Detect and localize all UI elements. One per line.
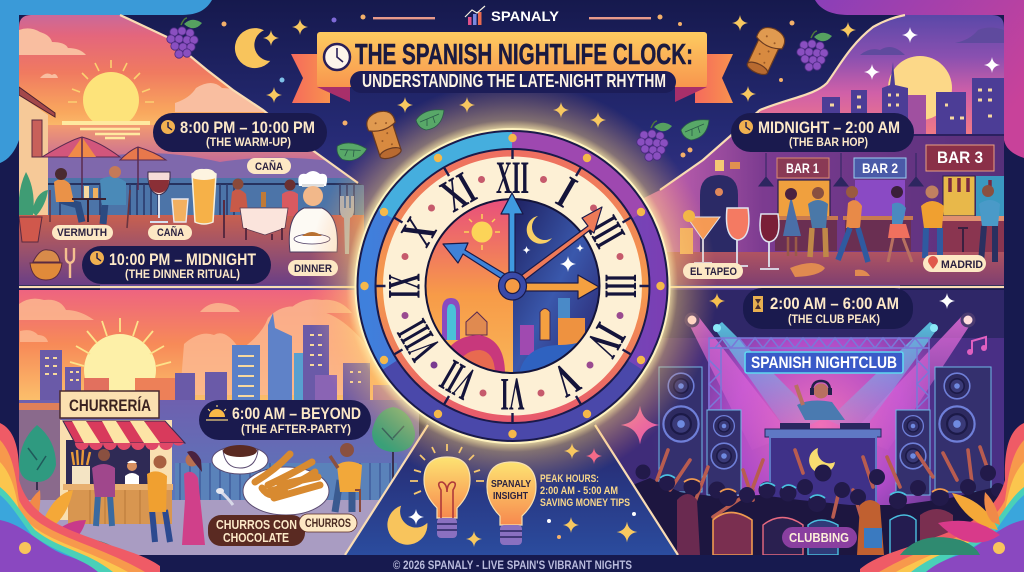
- sign: bar 2: BAR 2: [862, 161, 898, 176]
- peak hours tips: SAVING MONEY TIPS: [540, 497, 630, 509]
- label: dinner: DINNER: [294, 263, 332, 275]
- icon: leaf top: [416, 110, 444, 130]
- fence: [175, 463, 397, 503]
- band outline: [376, 149, 650, 423]
- face dots: [402, 176, 624, 396]
- roman numerals: XI: [433, 162, 484, 222]
- windows: [45, 335, 361, 396]
- title: THE SPANISH NIGHTLIFE CLOCK:: [355, 39, 693, 71]
- icon: leaf left: [333, 137, 367, 167]
- icon: grapes left: [167, 18, 202, 58]
- seated man: [330, 443, 362, 512]
- ribbon folds: [317, 87, 707, 102]
- dial scene outline: [426, 199, 600, 373]
- interior wall: [620, 134, 1010, 259]
- bezel top-left: [385, 140, 512, 214]
- banner plate: [317, 32, 707, 87]
- bar counters: [770, 216, 1006, 255]
- sign: churrería: [60, 391, 159, 418]
- label: churros: [299, 514, 357, 532]
- arch and domes: [442, 298, 585, 355]
- floor puddles: [790, 263, 870, 277]
- trees: [19, 407, 415, 490]
- sign: bar 1: [777, 158, 829, 178]
- hills: [48, 153, 359, 184]
- roman numerals: XII: [496, 152, 529, 204]
- speaker: right large: [935, 367, 991, 492]
- speakers: [659, 367, 991, 495]
- drinks: vermouth and caña: [148, 169, 216, 224]
- coloured inner band: [380, 153, 646, 419]
- churro stall: [60, 420, 173, 524]
- footer credit: © 2026 SPANALY - LIVE SPAIN'S VIBRANT NIGHTS: [393, 558, 632, 572]
- time pill: bar hop: (THE BAR HOP): [789, 135, 868, 149]
- label: churros con chocolate: [208, 515, 305, 546]
- clock outer edge: [354, 128, 670, 444]
- couple at table: [50, 166, 130, 228]
- logo icon: [465, 6, 485, 25]
- hub centre: [505, 278, 520, 294]
- bulb rays: [410, 444, 484, 494]
- bulb caption: [491, 478, 531, 502]
- lamps: [759, 153, 923, 186]
- bulb caption: INSIGHT: [493, 490, 528, 502]
- diagonal sky wedge: [660, 112, 760, 192]
- skyline: [40, 313, 403, 400]
- roman numerals: IV: [576, 315, 636, 365]
- ribbon right tail: [695, 54, 733, 103]
- hand: upward minute: [501, 193, 523, 280]
- night moon: [527, 216, 552, 244]
- sign: bar 3: BAR 3: [937, 148, 983, 167]
- stage backdrop: [590, 290, 1010, 560]
- label: churros con chocolate: CHOCOLATE: [223, 531, 289, 545]
- icon: clock: [161, 120, 175, 134]
- icon: grapes right: [797, 31, 832, 71]
- roman numerals: X: [391, 209, 447, 255]
- hour ticks and gold studs: [360, 134, 665, 438]
- tapas door: [680, 160, 740, 254]
- label: dinner: [288, 260, 338, 276]
- pavement: [28, 500, 379, 555]
- clouds: [860, 28, 1004, 55]
- brand rules: [373, 17, 651, 19]
- time pill: warm-up: [153, 113, 327, 152]
- coloured bezel: [366, 140, 658, 432]
- spot lamps: [686, 314, 974, 332]
- hand: upper right: [518, 207, 602, 283]
- icon: grapes centre: [637, 121, 672, 161]
- roman numerals: I: [548, 167, 585, 218]
- crowd: [620, 447, 1005, 555]
- roman numerals: III: [594, 274, 646, 298]
- clouds: [19, 299, 370, 395]
- bezel bottom: [390, 365, 635, 432]
- label: caña lower: [148, 225, 192, 240]
- label: caña upper: [247, 158, 291, 174]
- time pill: warm-up: 8:00 PM – 10:00 PM: [180, 118, 315, 137]
- speaker: left large: [659, 367, 702, 492]
- chef: [289, 171, 337, 252]
- moon and sparkles: [380, 443, 637, 552]
- crowd silhouette: [620, 478, 1004, 555]
- dinner table guests: [224, 178, 298, 240]
- rainbow blob: bottom right: [857, 423, 1024, 572]
- time pill: dinner ritual: 10:00 PM – MIDNIGHT: [109, 250, 257, 269]
- crowd rim lights: [660, 475, 906, 498]
- brand name: SPANALY: [491, 8, 560, 24]
- roman numerals: VI: [500, 368, 524, 420]
- insight section: [380, 443, 637, 552]
- rainbow hills: [438, 330, 600, 374]
- label: clubbing: CLUBBING: [789, 530, 849, 545]
- moon sun: [888, 56, 952, 120]
- clock hands: [443, 193, 602, 300]
- music notes and sparkles: [621, 293, 987, 444]
- clock icon: [324, 44, 350, 70]
- time pill: club peak: [743, 288, 913, 329]
- icon: hourglass: [753, 296, 763, 312]
- fence: [48, 178, 364, 215]
- crowd arms: [657, 447, 988, 523]
- icon: crescent moon: [230, 24, 278, 72]
- title banner: [291, 32, 733, 103]
- brand header: [373, 6, 651, 25]
- label: clubbing: [782, 527, 857, 548]
- panel: warm-up and dinner terrace: [19, 15, 364, 285]
- light beams: [688, 316, 972, 450]
- panel: after-party churrería: [0, 290, 430, 556]
- icon: clock: [739, 120, 753, 134]
- icon: gold sparkles: [263, 15, 856, 128]
- skyline: [822, 62, 1004, 138]
- bar windows: [778, 176, 1004, 218]
- sign: spanish nightclub: SPANISH NIGHTCLUB: [751, 353, 897, 372]
- icon: leaf right: [681, 120, 709, 140]
- rainbow blob: bottom left: [0, 423, 167, 572]
- time pill: club peak: (THE CLUB PEAK): [788, 312, 880, 326]
- time pill: club peak: 2:00 AM – 6:00 AM: [770, 294, 899, 313]
- speaker: right small: [896, 410, 930, 495]
- decorative blob: blue top left: [0, 0, 212, 163]
- time pill: after-party: (THE AFTER-PARTY): [241, 422, 351, 436]
- label: caña lower: CAÑA: [157, 226, 184, 239]
- house: [19, 87, 55, 215]
- sun: [62, 60, 154, 128]
- roman numerals: VII: [433, 350, 484, 410]
- ribbon left tail: [291, 54, 330, 103]
- horizon: [48, 125, 325, 162]
- label: churros: CHURROS: [305, 518, 351, 530]
- icon: clock: [90, 251, 104, 265]
- sign: bar 1: BAR 1: [786, 161, 819, 176]
- roman numerals: V: [545, 352, 588, 407]
- label: churros con chocolate: CHURROS CON: [216, 518, 297, 532]
- time pill: dinner ritual: (THE DINNER RITUAL): [125, 267, 240, 281]
- speaker: left small: [707, 410, 741, 495]
- crowd torsos: [677, 494, 953, 555]
- umbrellas: [42, 137, 166, 200]
- bulb right: [487, 462, 536, 545]
- ceiling beam: [757, 134, 1004, 136]
- awning: [63, 421, 185, 450]
- clock: [354, 128, 670, 444]
- truss: [709, 338, 929, 410]
- right dim wall: [930, 336, 1005, 506]
- floor: [620, 252, 1010, 286]
- time pill: dinner ritual: [82, 246, 271, 284]
- left dim wall: [600, 336, 708, 506]
- lower city: [19, 400, 419, 500]
- sign: churrería: CHURRERÍA: [69, 396, 151, 415]
- time pill: bar hop: [731, 113, 914, 152]
- icon: sunrise: [206, 405, 228, 420]
- panel: bar hop: [644, 15, 1004, 285]
- fork: [340, 196, 354, 254]
- sun reflection: [80, 129, 140, 138]
- subtitle pill: [350, 71, 676, 93]
- hand: upper left: [443, 243, 508, 281]
- ledge: [19, 403, 64, 410]
- peak hours tips: [540, 473, 630, 509]
- label: el tapeo: [683, 263, 743, 279]
- icon: cork right: [743, 23, 788, 78]
- building windows: [830, 90, 992, 118]
- time pill: after-party: 6:00 AM – BEYOND: [232, 404, 361, 423]
- sign: bar 3: [926, 145, 994, 171]
- label: vermuth: VERMUTH: [57, 227, 107, 239]
- low wall: [19, 410, 61, 500]
- night sky decorations: [167, 14, 856, 167]
- peak hours tips: PEAK HOURS:: [540, 473, 599, 485]
- roman numerals: IX: [378, 273, 430, 298]
- terrace sky: [19, 15, 265, 125]
- bezel outline: [358, 131, 668, 441]
- label: madrid: [923, 255, 986, 272]
- DJ: [796, 381, 845, 420]
- subtitle: UNDERSTANDING THE LATE-NIGHT RHYTHM: [362, 71, 666, 91]
- sunrise: [70, 318, 172, 390]
- bowl and fork icon: [30, 248, 74, 280]
- bar patrons: [783, 185, 1000, 262]
- time pill: after-party: [199, 400, 371, 440]
- day half: [425, 199, 513, 374]
- roman numerals: III: [577, 208, 635, 256]
- day sun: [464, 214, 500, 250]
- night half: [513, 199, 601, 374]
- label: el tapeo: EL TAPEO: [690, 266, 737, 278]
- bulb left: [424, 457, 470, 538]
- crowd heads: [636, 464, 1005, 512]
- stars: [864, 27, 1000, 80]
- leaves: [30, 490, 111, 546]
- clock glow: [307, 81, 717, 491]
- ceiling strip: [600, 290, 1004, 338]
- hand: right: [520, 275, 599, 299]
- bezel top-right: [512, 140, 640, 214]
- clouds: [19, 28, 265, 112]
- plates and churros: [212, 445, 329, 515]
- icon: cork left: [364, 108, 405, 162]
- sky: [19, 290, 390, 400]
- time pill: warm-up: (THE WARM-UP): [206, 135, 291, 149]
- day-night dial scene: [425, 199, 601, 374]
- plant: [19, 172, 48, 242]
- roman numerals: [378, 152, 646, 420]
- label: caña upper: CAÑA: [255, 160, 283, 173]
- label: madrid: MADRID: [941, 259, 983, 271]
- hub: [498, 272, 526, 300]
- top centre night sky: [100, 0, 900, 290]
- centre divider: [511, 199, 514, 289]
- leaves: club corner: [900, 492, 1000, 555]
- bulb caption: SPANALY: [491, 478, 531, 490]
- cocktail and wine glasses: [683, 208, 779, 269]
- night stars: [522, 244, 584, 272]
- footer strip: [160, 555, 860, 572]
- sign: bar 2: [854, 158, 906, 178]
- roman numerals: VIII: [387, 311, 450, 369]
- DJ booth: [765, 423, 881, 507]
- peak hours tips: 2:00 AM - 5:00 AM: [540, 485, 618, 497]
- decorative blob: purple top right: [815, 0, 1024, 158]
- customers: [92, 449, 205, 545]
- time pill: bar hop: MIDNIGHT – 2:00 AM: [758, 118, 900, 137]
- deck: [19, 215, 364, 286]
- panel: club peak: [590, 290, 1010, 560]
- dusk sky: [758, 15, 1004, 134]
- confetti dots: [222, 14, 794, 158]
- insight panel background: [345, 420, 678, 555]
